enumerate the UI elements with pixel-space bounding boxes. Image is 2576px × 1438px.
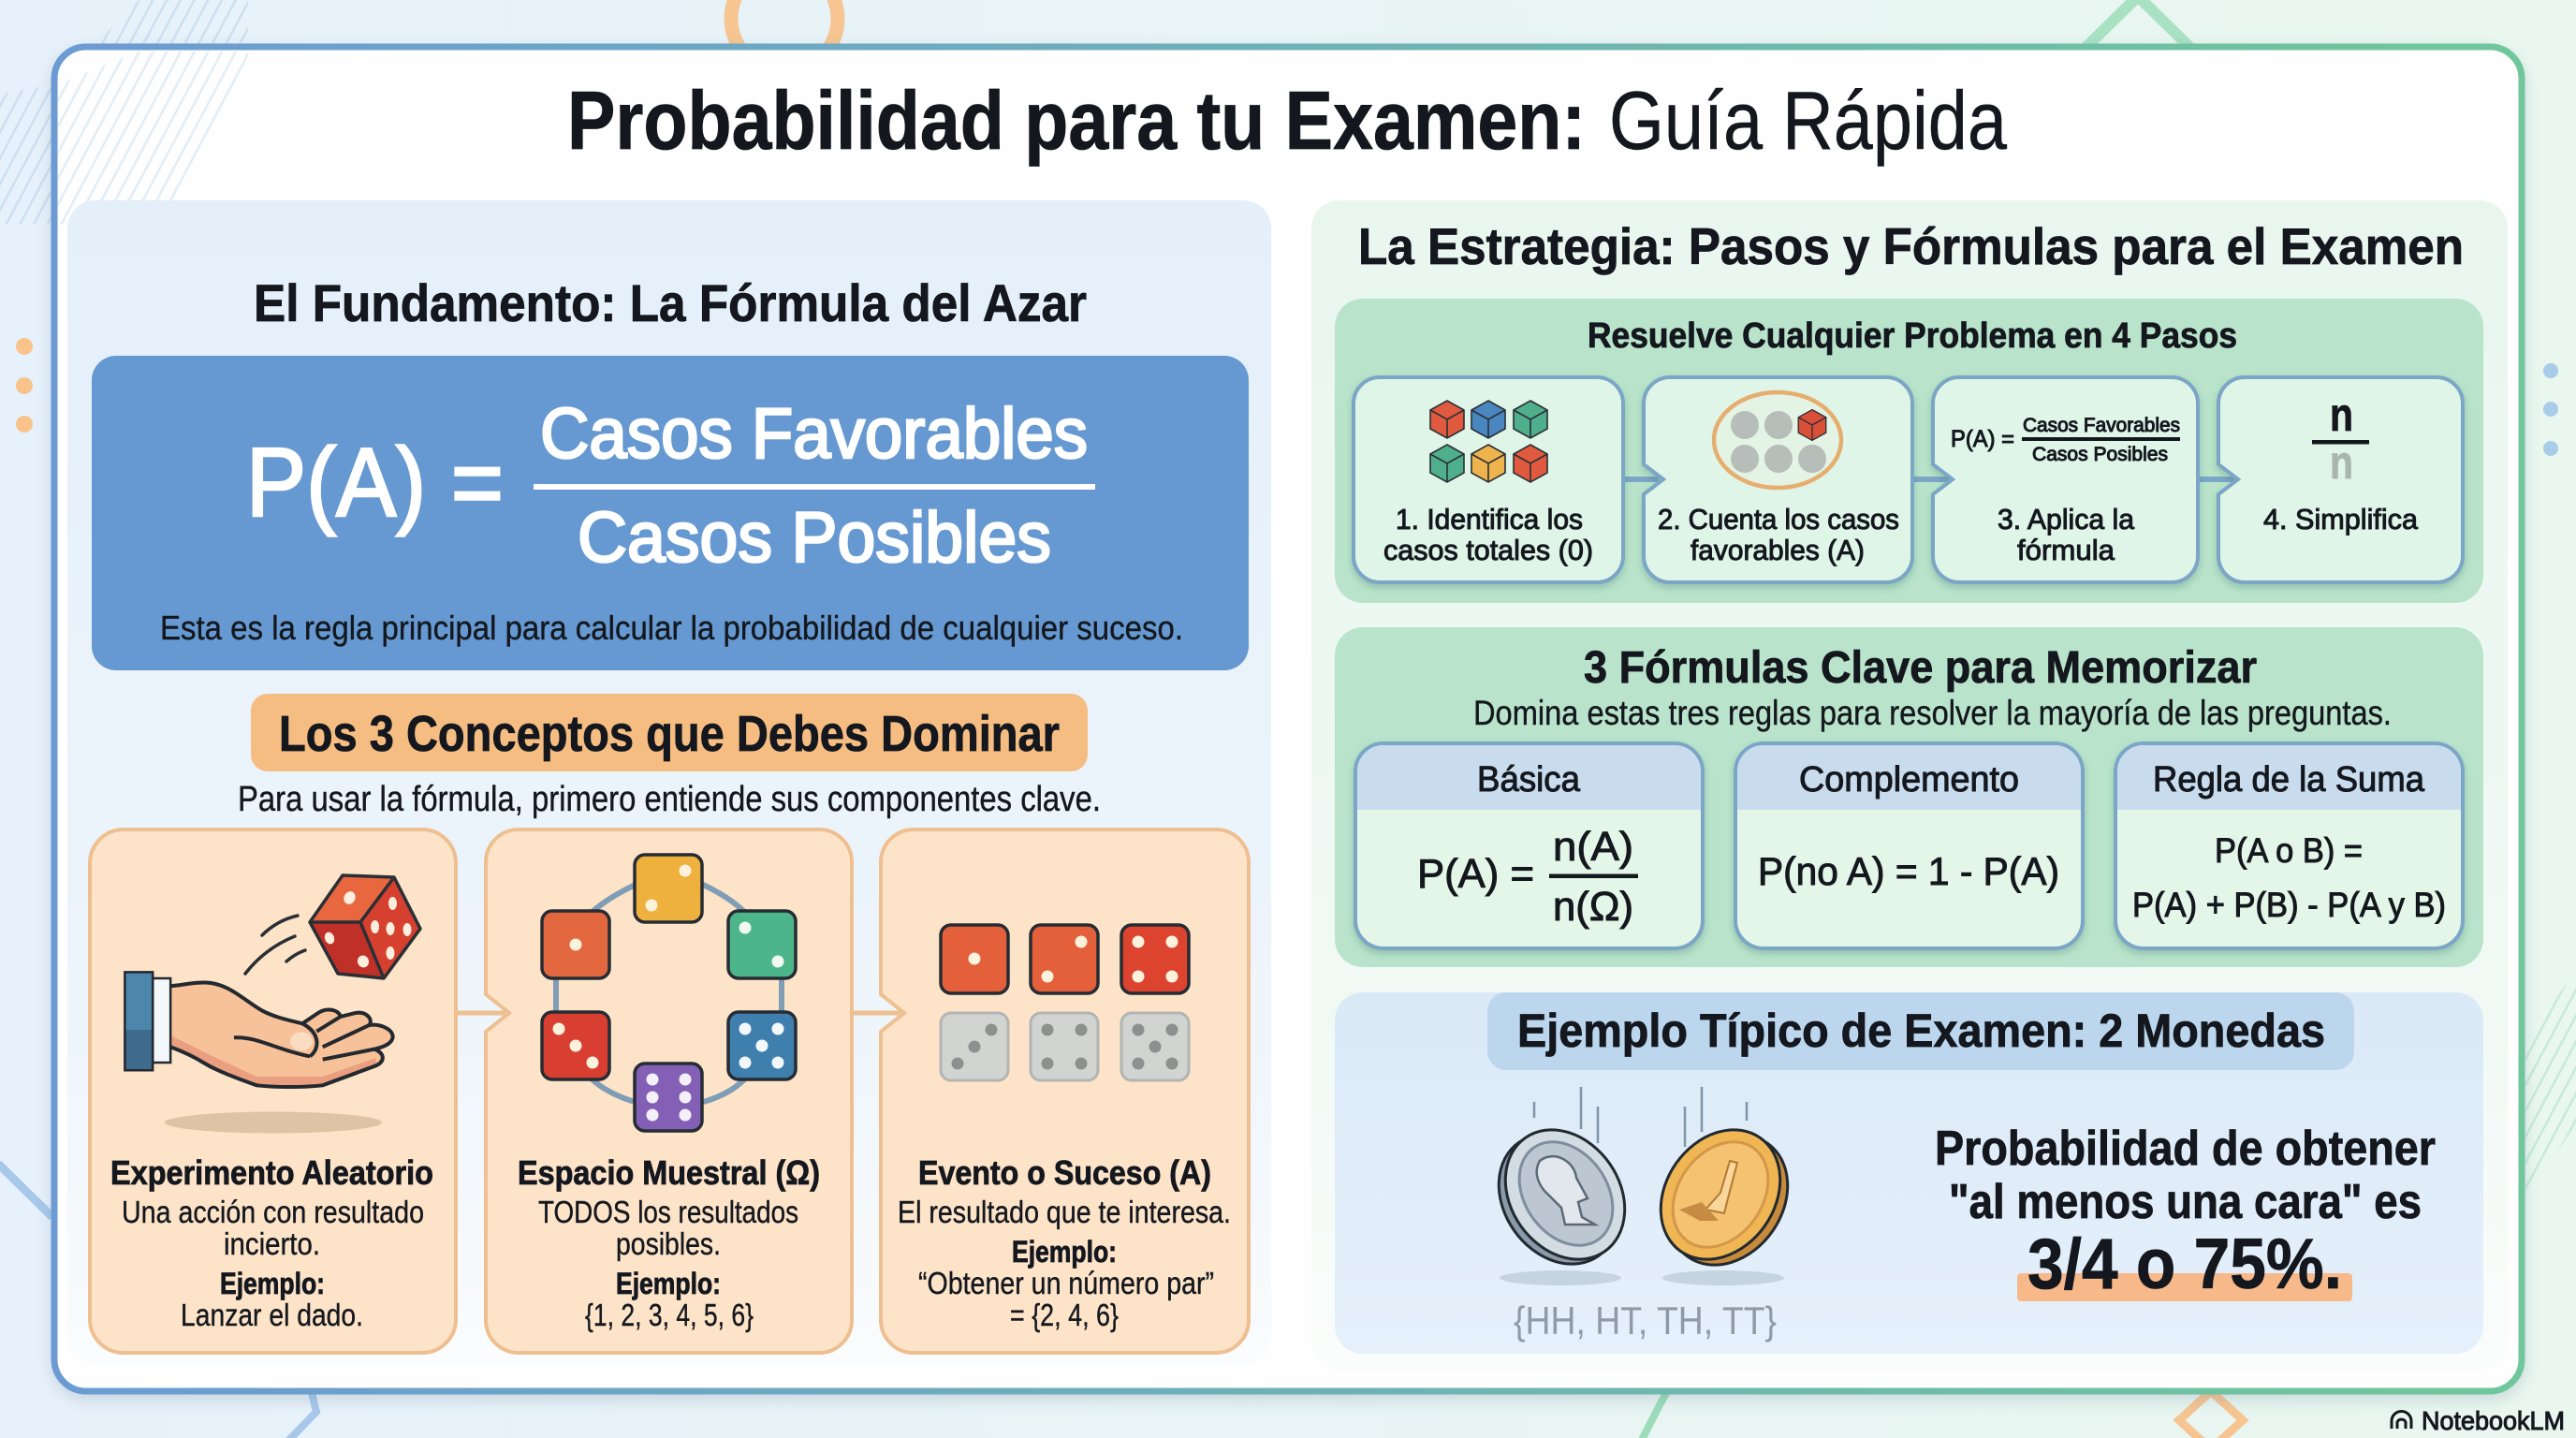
card: evento o suceso: = {2, 4, 6} (1010, 1298, 1119, 1332)
card: experimento aleatorio: incierto. (224, 1226, 320, 1261)
icon: gold coin (1636, 1107, 1812, 1288)
card: espacio muestral: posibles. (616, 1226, 721, 1261)
concepts heading pill: Los 3 Conceptos que Debes Dominar (279, 706, 1060, 762)
step 3: fórmula (2017, 534, 2115, 566)
formula card: regla de la suma (2115, 743, 2463, 948)
unfavourable dice (941, 1013, 1189, 1080)
result text: 3/4 o 75%. (2027, 1225, 2342, 1304)
mini formula: Casos Posibles (2032, 444, 2168, 465)
subtitle: formulas: Domina estas tres reglas para resolver la mayoría de las preguntas. (1473, 694, 2392, 732)
card: espacio muestral: Ejemplo: (616, 1267, 721, 1300)
icon: favourable outcome oval (1714, 392, 1841, 488)
formula card: basica: n(Ω) (1553, 884, 1633, 930)
card text: Evento o Suceso (A) (918, 1153, 1211, 1192)
step 4: 4. Simplifica (2263, 503, 2419, 536)
icon: cubes (1430, 401, 1547, 482)
result text: Probabilidad de obtener (1935, 1122, 2436, 1176)
heading: estrategia: La Estrategia: Pasos y Fórmulas para el Examen (1358, 217, 2464, 275)
formula card: regla de la suma: P(A) + P(B) - P(A y B) (2132, 886, 2446, 924)
card: espacio muestral: {1, 2, 3, 4, 5, 6} (585, 1298, 754, 1332)
ejemplo heading pill: Ejemplo Típico de Examen: 2 Monedas (1517, 1005, 2325, 1057)
result highlight (2017, 1273, 2352, 1301)
card: experimento aleatorio: Lanzar el dado. (181, 1298, 363, 1332)
icon: simplified fraction (2312, 389, 2369, 489)
mini formula: Casos Favorables (2023, 415, 2180, 436)
section: formulas clave (1335, 627, 2483, 967)
mini formula: P(A) = (1951, 426, 2014, 452)
formula box: Casos Favorables (540, 394, 1088, 474)
step 1: casos totales (0) (1383, 534, 1593, 566)
decorative hatch on card (58, 51, 248, 225)
sample space ring (556, 880, 782, 1105)
step 2: favorables (A) (1690, 534, 1865, 566)
arrow: espacio to evento (852, 1011, 900, 1015)
panel: estrategia (1311, 200, 2508, 1371)
icon: silver coin (1474, 1107, 1649, 1287)
icon: simplified fraction: n (2330, 436, 2353, 489)
step connectors (1623, 477, 2234, 482)
title: Guía Rápida (1609, 74, 2007, 167)
icon: simplified fraction: n (2330, 389, 2353, 441)
card: evento o suceso (881, 829, 1249, 1353)
step 2: 2. Cuenta los casos (1658, 503, 1899, 536)
card text: Experimento Aleatorio (110, 1153, 433, 1192)
formula card: basica: P(A) = (1417, 851, 1534, 897)
formula box: P(A) = (246, 429, 504, 537)
formula card: basica (1355, 743, 1703, 948)
arrow: experimento to espacio (456, 1011, 505, 1015)
dice ring (542, 855, 796, 1131)
card: evento o suceso: Ejemplo: (1012, 1235, 1117, 1269)
mini formula (1951, 415, 2180, 465)
section: 4 pasos (1335, 299, 2483, 603)
panel: fundamento (67, 200, 1271, 1365)
section: ejemplo (1335, 992, 2483, 1354)
formula box: Esta es la regla principal para calcular la probabilidad de cualquier suceso. (160, 609, 1183, 647)
formula card: complemento: P(no A) = 1 - P(A) (1758, 849, 2059, 893)
formula card: basica: n(A) (1553, 824, 1633, 870)
card: experimento aleatorio (90, 829, 456, 1353)
step 3 (1933, 377, 2198, 582)
concepts subtitle: Para usar la fórmula, primero entiende sus componentes clave. (238, 780, 1101, 819)
formula card: complemento: Complemento (1799, 760, 2019, 800)
card: espacio muestral: TODOS los resultados (538, 1195, 798, 1229)
card: evento o suceso: El resultado que te interesa. (898, 1195, 1231, 1229)
heading: formulas: 3 Fórmulas Clave para Memorizar (1584, 643, 2257, 693)
formula box: Casos Posibles (578, 498, 1051, 578)
heading: 4 pasos: Resuelve Cualquier Problema en 4 Pasos (1588, 316, 2237, 356)
formula card: regla de la suma: P(A o B) = (2215, 831, 2363, 870)
card text: Espacio Muestral (Ω) (518, 1153, 820, 1192)
card: espacio muestral (486, 829, 852, 1353)
result text: "al menos una cara" es (1949, 1175, 2422, 1229)
title: Probabilidad para tu Examen: (567, 74, 1586, 167)
step 3: 3. Aplica la (1998, 503, 2135, 536)
notebooklm watermark: NotebookLM (2422, 1406, 2565, 1435)
hand shadow (165, 1112, 382, 1133)
card: evento o suceso: “Obtener un número par” (918, 1266, 1214, 1300)
step 4 (2218, 377, 2463, 582)
card: experimento aleatorio: Ejemplo: (220, 1267, 325, 1300)
favourable dice (941, 925, 1189, 993)
formula box (92, 356, 1249, 670)
step 2 (1644, 377, 1912, 582)
formula card: complemento (1735, 743, 2083, 948)
icon: hand (124, 972, 393, 1087)
heading: fundamento: El Fundamento: La Fórmula del Azar (254, 273, 1087, 332)
step 1: 1. Identifica los (1396, 503, 1583, 536)
result text (1935, 1122, 2436, 1304)
card: experimento aleatorio: Una acción con resultado (122, 1195, 424, 1229)
icon: motion lines (1534, 1087, 1747, 1147)
icon: thrown die (245, 875, 420, 978)
step 1 (1354, 377, 1623, 582)
formula card: regla de la suma: Regla de la Suma (2153, 760, 2425, 800)
concepts heading pill (251, 694, 1088, 771)
formula card: basica: Básica (1477, 760, 1581, 800)
sample space text: {HH, HT, TH, TT} (1514, 1299, 1777, 1343)
ejemplo heading pill (1487, 992, 2354, 1070)
